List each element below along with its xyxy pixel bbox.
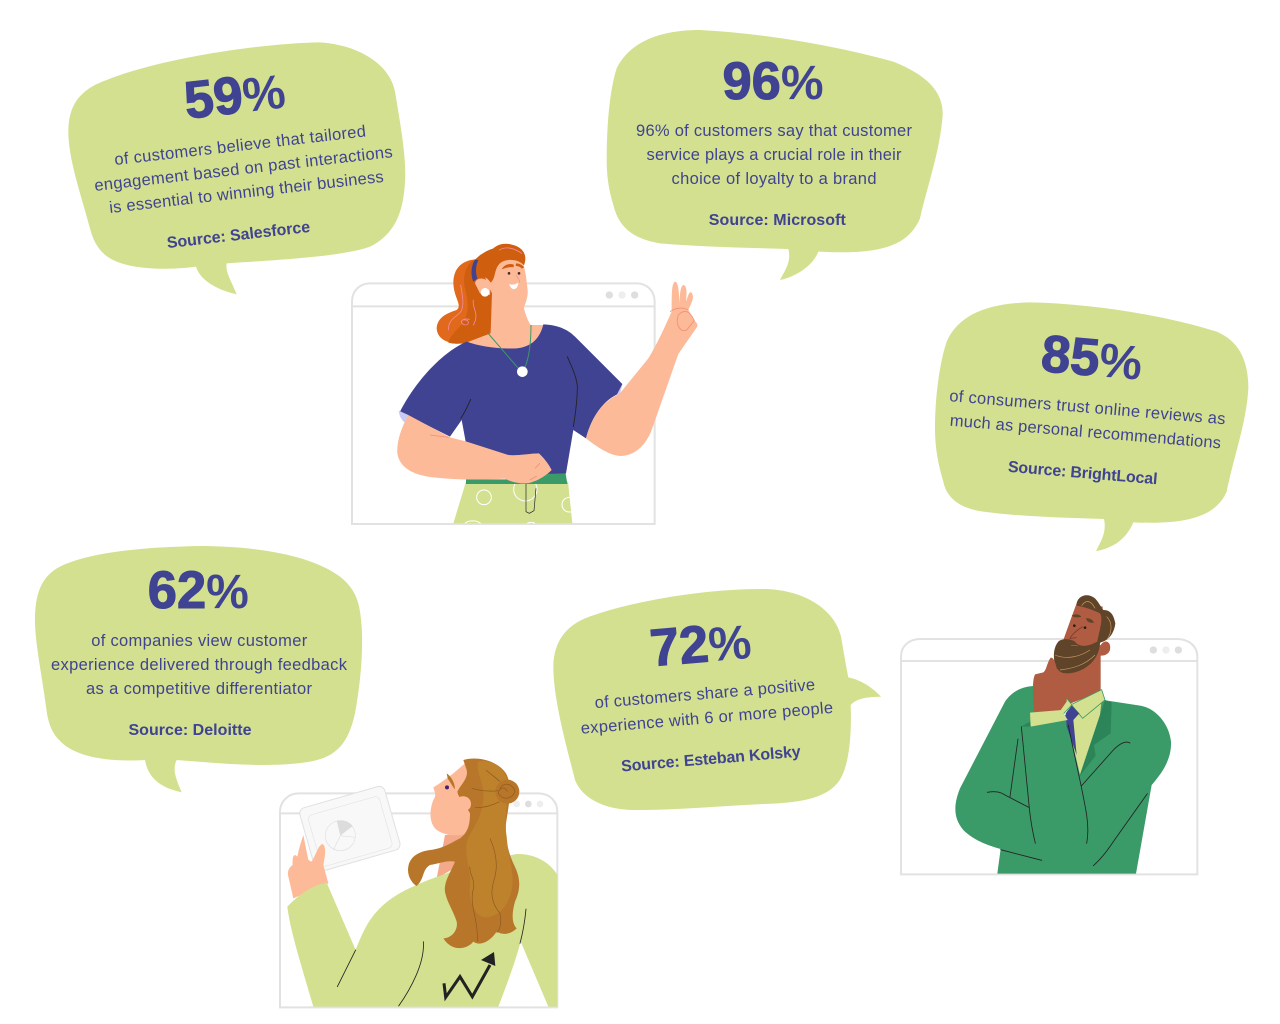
- description: [93, 122, 393, 217]
- shirt collar and front: [1059, 690, 1105, 775]
- hair back: [437, 259, 493, 344]
- description: of consumers trust online reviews as: [949, 387, 1226, 428]
- panel: woman with tablet illustration: [280, 759, 557, 1007]
- face: [1058, 602, 1103, 652]
- description: experience with 6 or more people: [580, 699, 834, 738]
- right arm and hand: [586, 282, 698, 456]
- hair highlight: [466, 761, 513, 917]
- beard: [1054, 639, 1100, 673]
- description: [580, 676, 834, 738]
- panel: speech bubble 62%: [35, 546, 362, 792]
- bubble shape: [68, 42, 405, 294]
- hair strands: [448, 248, 522, 330]
- panel: man in green suit illustration: [901, 595, 1197, 874]
- stat: 59%: 59%: [181, 61, 288, 131]
- source: Source: Esteban Kolsky: [621, 744, 801, 775]
- description: [51, 632, 348, 698]
- description: engagement based on past interactions: [93, 143, 393, 195]
- description: experience delivered through feedback: [51, 656, 348, 674]
- source: Source: Microsoft: [709, 212, 846, 229]
- green jumper: [287, 854, 557, 1007]
- hand details: [430, 308, 694, 480]
- suit arm shadow: [1021, 722, 1031, 727]
- garment creases: [461, 357, 577, 427]
- hair bun: [470, 770, 519, 942]
- neck and face: [467, 250, 543, 360]
- bubble shape: [935, 302, 1248, 551]
- sleeve linings: [399, 384, 622, 423]
- description: choice of loyalty to a brand: [672, 170, 876, 188]
- source: Source: BrightLocal: [1007, 459, 1158, 488]
- eye and brow: [445, 773, 455, 789]
- description: [636, 122, 912, 188]
- source: Source: Deloitte: [128, 722, 252, 739]
- description: [949, 387, 1226, 452]
- hair: [1077, 595, 1115, 642]
- shirt cuff: [1030, 710, 1068, 727]
- panel: speech bubble 59%: [68, 42, 405, 294]
- ear: [457, 796, 471, 811]
- stat: 85%: 85%: [1039, 324, 1145, 392]
- source: Source: Salesforce: [166, 219, 311, 252]
- lapel shadow: [1079, 700, 1112, 777]
- green suit: [955, 686, 1171, 874]
- suit creases: [987, 725, 1147, 866]
- description: of customers believe that tailored: [113, 122, 367, 169]
- necklace: [489, 325, 531, 377]
- left arm and hand: [397, 415, 552, 483]
- panel: speech bubble 85%: [935, 302, 1248, 551]
- description: much as personal recommendations: [949, 412, 1222, 452]
- rising arrow: [444, 952, 495, 997]
- neck: [437, 833, 467, 878]
- browser window frame: [280, 793, 557, 1007]
- bubble shape: [607, 30, 943, 280]
- description: of companies view customer: [91, 632, 308, 650]
- description: is essential to winning their business: [108, 168, 385, 217]
- tie: [1066, 706, 1079, 755]
- panel: speech bubble 72%: [553, 589, 881, 810]
- tablet: [298, 785, 401, 873]
- hair band: [472, 259, 478, 282]
- description: of customers share a positive: [594, 676, 816, 712]
- stat: 96%: 96%: [722, 52, 824, 111]
- skirt: [453, 478, 577, 523]
- waistband: [466, 472, 567, 484]
- description: 96% of customers say that customer: [636, 122, 912, 140]
- description: as a competitive differentiator: [86, 680, 312, 698]
- bubble shape: [553, 589, 881, 810]
- face: [431, 763, 483, 835]
- panel: woman with OK gesture illustration: [352, 244, 698, 524]
- front hair: [475, 244, 525, 283]
- description: service plays a crucial role in their: [646, 146, 902, 164]
- hair and beard strands: [1055, 602, 1111, 670]
- stat: 62%: 62%: [148, 561, 249, 620]
- stat: 72%: 72%: [648, 611, 753, 678]
- hand holding tablet: [288, 835, 328, 898]
- shirt: [400, 324, 622, 475]
- hair main: [408, 759, 519, 948]
- jumper creases: [337, 909, 526, 1006]
- browser window frame: [901, 639, 1197, 874]
- ear and earring: [475, 279, 491, 297]
- browser window frame: [352, 283, 655, 524]
- neck and ear: [1057, 641, 1110, 705]
- bubble shape: [35, 546, 362, 792]
- facial features: [1070, 614, 1094, 646]
- panel: speech bubble 96%: [607, 30, 943, 280]
- face details: [502, 263, 524, 289]
- hand on chin: [1033, 658, 1073, 712]
